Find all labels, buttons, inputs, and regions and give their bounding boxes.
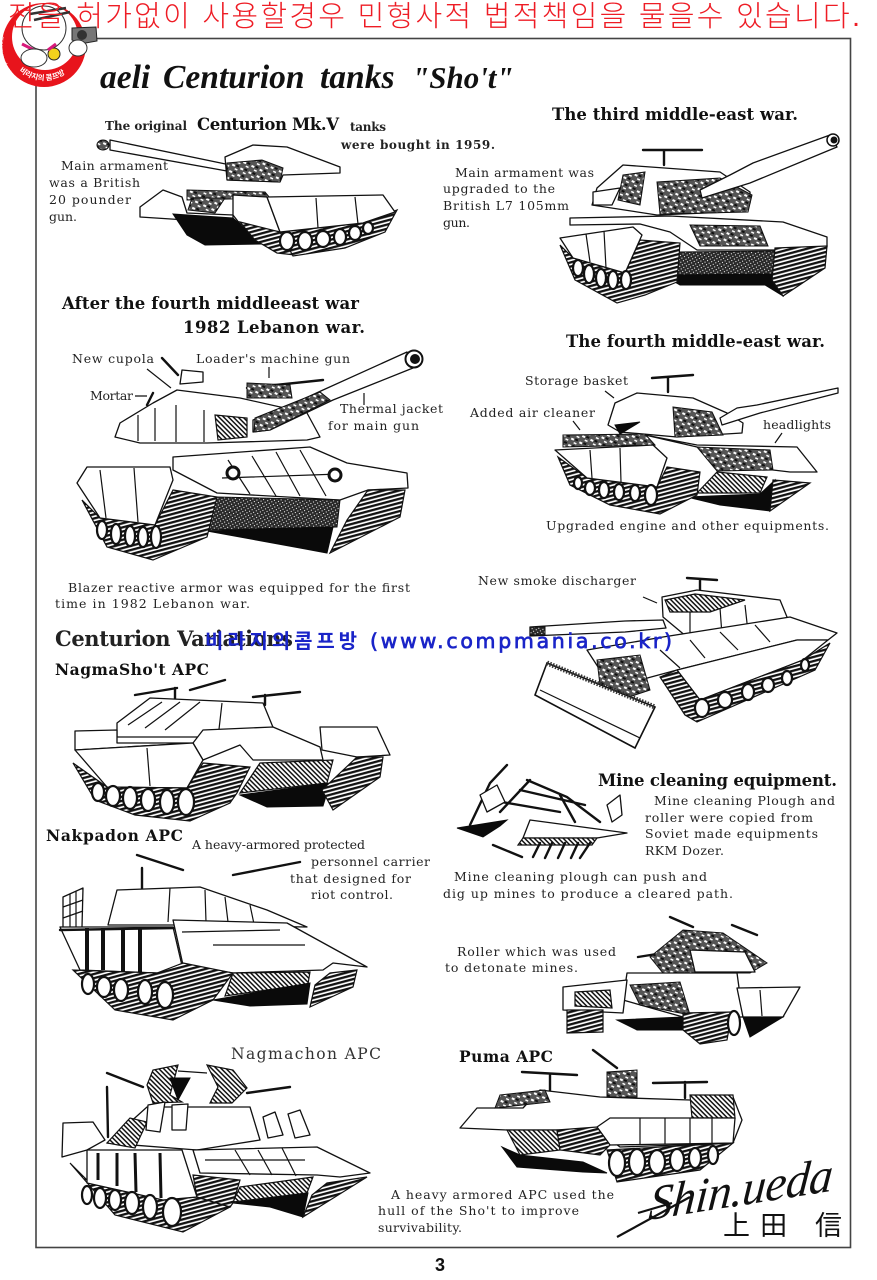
text: main armament: Main armament <box>61 158 168 173</box>
text: roller <box>445 944 616 975</box>
text: Nakpadon description: A heavy-armored protected <box>191 837 365 852</box>
watermark: blue site URL <box>205 629 672 653</box>
illustration: fourth war tank <box>555 375 838 514</box>
text: main armament: gun. <box>49 209 77 224</box>
callouts <box>72 351 443 433</box>
text: plough function <box>443 869 733 901</box>
heading: 1982 Lebanon war. <box>183 318 365 337</box>
logo: Biraji's comp room badge: 비라지의 콤프방 <box>20 66 64 82</box>
text: main armament <box>49 158 168 224</box>
illustration: tank with dozer blade <box>530 578 837 748</box>
text: L7 gun upgrade <box>443 165 594 230</box>
panel: third middle-east war <box>443 105 839 303</box>
text: Blazer reactive armor: Blazer reactive armor was equipped for the first <box>68 580 410 595</box>
text: L7 gun upgrade: Main armament was <box>455 165 594 180</box>
text: upgraded engine: Upgraded engine and other equipments. <box>546 518 829 533</box>
text: Puma description <box>378 1187 614 1235</box>
illustration: mine plough <box>457 765 627 858</box>
text: plough origin: Soviet made equipments <box>645 826 818 841</box>
callouts <box>469 373 831 432</box>
section heading: Centurion Variations: Centurion Variations <box>55 626 293 651</box>
callouts: Loader's machine gun <box>196 351 350 366</box>
panel: Lebanon war upgrade <box>55 294 443 611</box>
callouts: Mortar <box>90 388 133 403</box>
heading: Centurion Mk.V: The original <box>105 119 187 133</box>
illustration: Centurion Mk.V tank <box>97 140 397 256</box>
text: Puma description: survivability. <box>378 1220 462 1235</box>
signature: Shin.ueda <box>647 1147 836 1231</box>
label: NagmaSho't APC <box>55 660 209 679</box>
text: L7 gun upgrade: upgraded to the <box>443 181 555 196</box>
text: roller: Roller which was used <box>457 944 616 959</box>
panel: Nakpadon APC <box>46 826 430 1020</box>
text: plough origin: roller were copied from <box>645 810 813 825</box>
text: plough origin: RKM Dozer. <box>645 843 724 858</box>
page number: 3 <box>435 1255 445 1275</box>
text: L7 gun upgrade: gun. <box>443 215 470 230</box>
illustration: NagmaSho't <box>73 680 390 821</box>
title: tanks <box>320 59 394 96</box>
label: Nagmachon APC <box>231 1045 381 1063</box>
heading: The third middle-east war. <box>552 105 798 124</box>
text: Nakpadon description <box>191 837 430 902</box>
callout arrows <box>573 391 782 443</box>
text: Blazer reactive armor <box>55 580 410 611</box>
heading: Centurion Mk.V <box>105 115 495 152</box>
callouts: Storage basket <box>525 373 628 388</box>
text: Puma description: A heavy armored APC used the <box>390 1187 614 1202</box>
panel: fourth middle-east war <box>469 332 838 533</box>
text: Nakpadon description: riot control. <box>311 887 393 902</box>
text: plough origin: Mine cleaning Plough and <box>654 793 835 808</box>
panel: Nagmachon APC <box>62 1045 381 1232</box>
heading: Centurion Mk.V: were bought in 1959. <box>340 138 495 152</box>
text: main armament: was a British <box>49 175 140 190</box>
watermark: blue site URL: 비라지의콤프방 <box>205 630 357 653</box>
callouts: Added air cleaner <box>469 405 595 420</box>
title: aeli <box>100 59 151 96</box>
label: Puma APC <box>459 1047 553 1066</box>
text: roller: to detonate mines. <box>445 960 578 975</box>
illustration: Nagmachon <box>62 1065 370 1232</box>
text: Blazer reactive armor: time in 1982 Lebanon war. <box>55 596 250 611</box>
callout arrow <box>643 597 657 603</box>
text: L7 gun upgrade: British L7 105mm <box>443 198 569 213</box>
panel: NagmaSho't APC <box>55 660 390 821</box>
text: plough function: dig up mines to produce a cleared path. <box>443 886 733 901</box>
panel: mine cleaning equipment <box>443 765 837 1044</box>
signature: 上田 信 <box>723 1211 842 1241</box>
text: Puma description: hull of the Sho't to improve <box>378 1203 579 1218</box>
text: Nakpadon description: personnel carrier <box>311 854 430 869</box>
illustration: Nakpadon <box>60 855 367 1020</box>
title: "Sho't" <box>412 60 514 95</box>
heading: Centurion Mk.V: Centurion Mk.V <box>197 115 340 134</box>
panel: smoke discharger tank with dozer <box>478 573 837 748</box>
title: Centurion <box>163 59 305 96</box>
illustration: Sho't Lebanon tank <box>77 350 422 560</box>
heading: Mine cleaning equipment. <box>598 771 837 790</box>
heading: The fourth middle-east war. <box>566 332 825 351</box>
callout: New smoke discharger <box>478 573 636 588</box>
illustration: Puma <box>460 1050 742 1182</box>
illustration: roller tank <box>563 917 800 1044</box>
logo: Biraji's comp room badge <box>2 3 98 87</box>
text: plough origin <box>645 793 835 858</box>
callout arrows <box>135 367 364 405</box>
watermark: blue site URL: (www.compmania.co.kr) <box>370 629 672 653</box>
panel: Puma APC <box>378 1047 742 1235</box>
text: plough function: Mine cleaning plough can push and <box>454 869 707 884</box>
heading <box>61 294 365 337</box>
callouts: for main gun <box>328 418 419 433</box>
callouts: headlights <box>763 417 831 432</box>
text: Nakpadon description: that designed for <box>290 871 411 886</box>
watermark: red copyright notice: 전을 허가없이 사용할경우 민형사적 법적책임을 물을수 있습니다. <box>8 0 860 33</box>
illustration: upgraded tank <box>560 134 839 303</box>
callouts: New cupola <box>72 351 155 366</box>
text: main armament: 20 pounder <box>49 192 131 207</box>
heading: After the fourth middleeast war <box>61 294 359 313</box>
label: Nakpadon APC <box>46 826 183 845</box>
heading: Centurion Mk.V: tanks <box>350 120 386 134</box>
panel: original Centurion Mk.V <box>49 115 495 256</box>
callouts: Thermal jacket <box>340 401 443 416</box>
